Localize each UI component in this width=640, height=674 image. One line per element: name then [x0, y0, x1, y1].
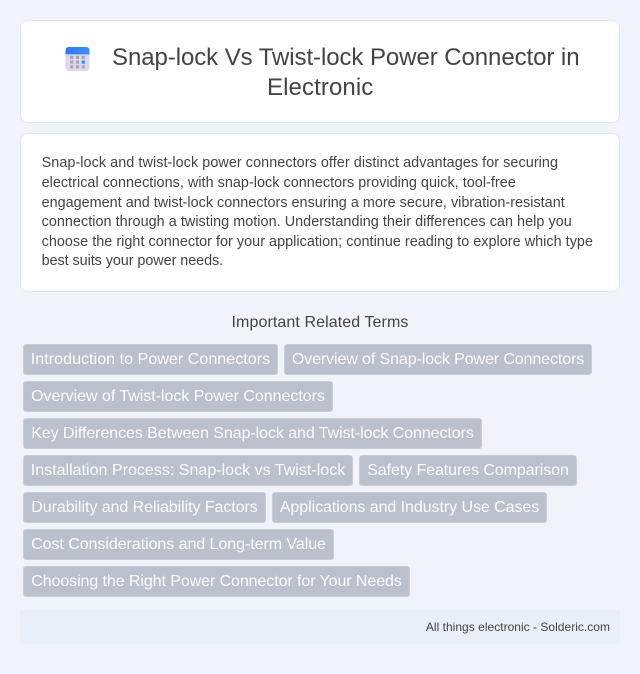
- tag list: [23, 344, 592, 597]
- tag: [23, 455, 353, 486]
- tag: Safety Features Comparison: [367, 462, 569, 479]
- title: Snap-lock Vs Twist-lock Power Connector in: [112, 44, 579, 71]
- intro paragraph: Snap-lock and twist-lock power connectors offer distinct advantages for securing: [42, 155, 558, 171]
- tag: [23, 344, 278, 375]
- tag: Overview of Twist-lock Power Connectors: [31, 388, 325, 405]
- tag: Durability and Reliability Factors: [31, 499, 258, 516]
- intro paragraph: electrical connections, with snap-lock connectors providing quick, tool-free: [42, 175, 516, 191]
- tag: [284, 344, 592, 375]
- footer credit: All things electronic - Solderic.com: [426, 620, 610, 634]
- title: Electronic: [267, 74, 373, 101]
- title: [112, 44, 579, 101]
- heading: related terms: Important Related Terms: [232, 314, 408, 331]
- tag: Introduction to Power Connectors: [31, 351, 270, 368]
- panel: title card: [20, 20, 620, 123]
- footer: [20, 610, 620, 644]
- tag: Key Differences Between Snap-lock and Twist-lock Connectors: [31, 425, 474, 442]
- intro paragraph: [42, 155, 593, 269]
- tag: Installation Process: Snap-lock vs Twist-lock: [31, 462, 345, 479]
- tag: Cost Considerations and Long-term Value: [31, 536, 326, 553]
- tag: [23, 529, 334, 560]
- intro paragraph: engagement and twist-lock connectors ensuring a more secure, vibration-resistant: [42, 195, 565, 211]
- panel: intro text: [20, 133, 620, 292]
- intro paragraph: choose the right connector for your application; continue reading to explore which type: [42, 234, 593, 250]
- tag: Overview of Snap-lock Power Connectors: [292, 351, 584, 368]
- tag: Choosing the Right Power Connector for Your Needs: [31, 573, 402, 590]
- icon: calendar grid: [66, 47, 90, 71]
- tag: [359, 455, 577, 486]
- tag: Applications and Industry Use Cases: [280, 499, 539, 516]
- tag: [23, 418, 482, 449]
- tag: [23, 492, 266, 523]
- intro paragraph: connection through a twisting motion. Understanding their differences can help you: [42, 214, 572, 230]
- tag: [272, 492, 547, 523]
- intro paragraph: best suits your power needs.: [42, 253, 223, 269]
- tag: [23, 381, 333, 412]
- tag: [23, 566, 410, 597]
